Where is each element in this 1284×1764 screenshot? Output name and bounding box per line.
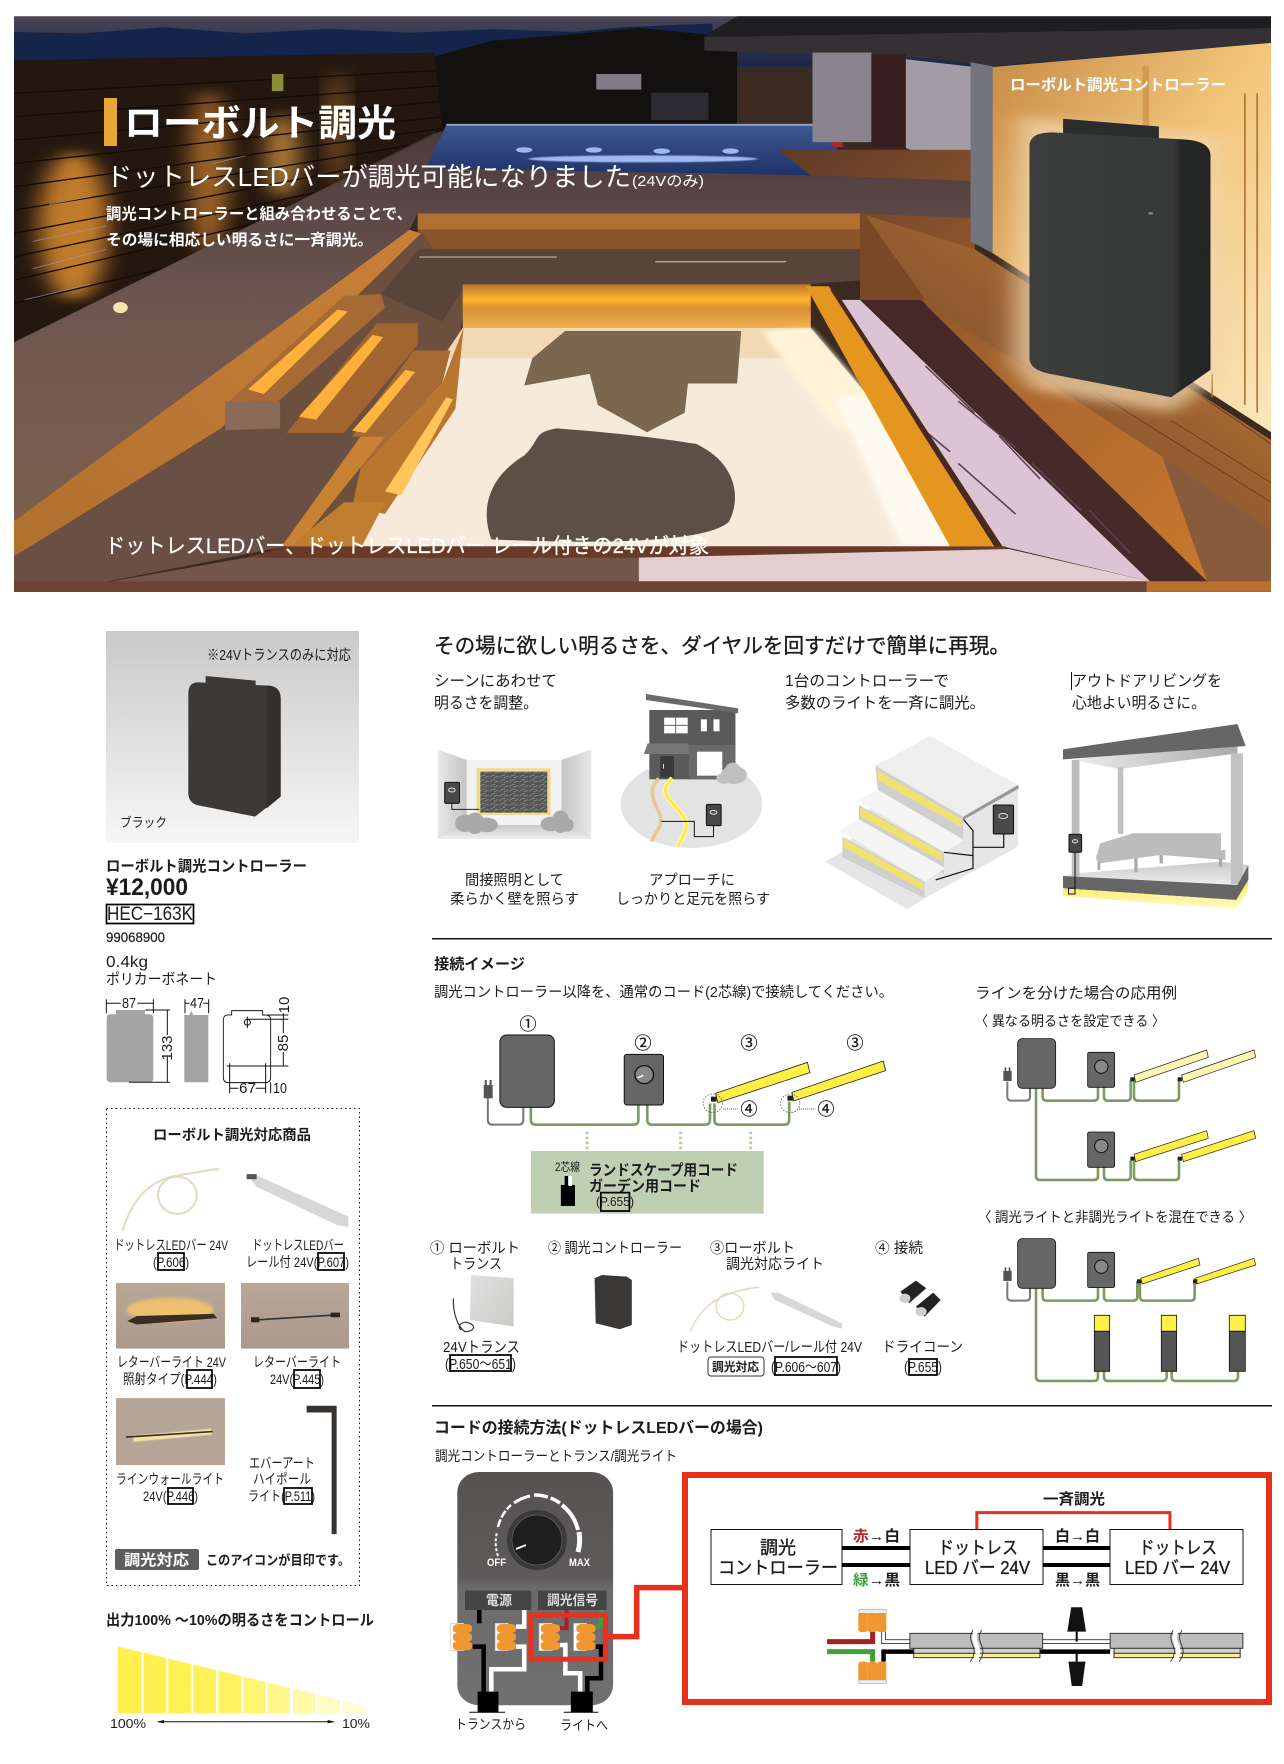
text: scene	[434, 672, 557, 712]
parts: controller	[548, 1240, 682, 1329]
illustration: house approach	[621, 694, 762, 848]
panel: compatible products	[106, 1108, 360, 1586]
hero photo: lit deck at dusk	[13, 16, 1271, 592]
wire colour labels	[853, 1527, 1100, 1589]
dimension drawings: 85	[275, 1035, 292, 1051]
section heading: line split examples: ラインを分けた場合の応用例	[975, 985, 1177, 1002]
wire colour labels: 白→白	[1055, 1527, 1100, 1545]
number markers: ①	[520, 1015, 536, 1034]
block: controller: 調光	[760, 1538, 796, 1558]
block: LED bar 1: ドットレス	[938, 1538, 1018, 1558]
cord label: ランドスケープ用コード	[589, 1162, 738, 1179]
dimension drawings: 133	[159, 1035, 176, 1061]
section heading: cord connection: コードの接続方法(ドットレスLEDバーの場合)	[434, 1418, 763, 1437]
diagram: two lines different brightness	[1003, 1039, 1256, 1180]
label: simultaneous dimming: 一斉調光	[1043, 1491, 1105, 1508]
product captions: 24V(P.446)	[143, 1488, 198, 1504]
product captions: レターバーライト	[253, 1354, 341, 1370]
wiring illustration	[827, 1607, 1243, 1686]
diagram: mixed dimmable and non-dimmable lights	[1003, 1239, 1256, 1381]
number markers: ③	[740, 1034, 758, 1053]
dimension drawings: 47	[190, 995, 204, 1012]
controller terminal diagram	[451, 1472, 613, 1733]
weight and material: ポリカーボネート	[106, 971, 217, 988]
dimension drawings: 10	[273, 1080, 287, 1097]
hero description	[106, 205, 412, 249]
illustration: pergola	[1063, 724, 1248, 909]
parts: controller: ② 調光コントローラー	[548, 1240, 682, 1257]
hero accent bar	[104, 98, 117, 146]
price: ¥12,000	[106, 874, 188, 901]
panel heading: ローボルト調光対応商品	[153, 1126, 311, 1144]
controller terminal diagram: トランスから	[455, 1717, 526, 1732]
caption: indirect lighting: 柔らかく壁を照らす	[450, 891, 579, 908]
chart: brightness output 100% to 10%	[110, 1646, 370, 1731]
controller terminal diagram: 電源	[486, 1593, 512, 1608]
parts: dimmable lights: 調光対応ライト	[726, 1256, 824, 1273]
cord label: (P.655)	[596, 1194, 634, 1209]
chart: brightness output 100% to 10%: 10%	[342, 1716, 370, 1731]
hero target note: ドットレスLEDバー、ドットレスLEDバー レール付きの24Vが対象	[105, 535, 709, 558]
connection note: 調光コントローラー以降を、通常のコード(2芯線)で接続してください。	[434, 984, 893, 1001]
dimension drawings: 87	[122, 995, 136, 1012]
badge explanation: このアイコンが目印です。	[206, 1552, 350, 1568]
parts: dimmable lights: ③ローボルト	[710, 1240, 795, 1257]
wire colour labels: 黒→黒	[1055, 1572, 1100, 1589]
parts: transformer: ① ローボルト	[430, 1240, 520, 1257]
product code: 99068900	[106, 929, 165, 945]
product captions: レール付 24V(P.607)	[246, 1254, 349, 1270]
cord label: 2芯線	[555, 1159, 580, 1174]
controller terminal diagram: OFF	[487, 1557, 506, 1569]
product panel	[106, 631, 359, 843]
text: many lights: 1台のコントローラーで	[785, 672, 949, 690]
chart: brightness output 100% to 10%: 100%	[110, 1716, 146, 1731]
block: LED bar 1: LED バー 24V	[925, 1558, 1030, 1578]
number markers: ③	[846, 1034, 864, 1053]
parts: dimmable lights: 調光対応	[712, 1359, 759, 1374]
link line: simultaneous dimming	[977, 1513, 1170, 1529]
model number: HEC−163K	[107, 904, 193, 925]
wire colour labels: 赤→白	[853, 1527, 900, 1545]
product images	[116, 1169, 349, 1534]
product captions: ハイポール	[253, 1471, 311, 1487]
caption: approach	[616, 872, 770, 908]
dimension drawings	[106, 995, 293, 1097]
caption: indirect lighting	[450, 872, 579, 908]
product captions: ドットレスLEDバー 24V	[114, 1237, 228, 1253]
product note: ※24Vトランスのみに対応	[207, 647, 351, 664]
colour label: ブラック	[120, 815, 167, 830]
hero subtitle: ドットレスLEDバーが調光可能になりました	[106, 162, 631, 192]
hero title: ローボルト調光	[124, 103, 396, 144]
parts: dimmable lights: ドットレスLEDバー/レール付 24V	[677, 1339, 862, 1356]
weight and material: 0.4kg	[106, 954, 148, 971]
cord label	[555, 1159, 738, 1209]
subheading: different brightness: 〈 異なる明るさを設定できる 〉	[975, 1013, 1165, 1029]
parts: transformer: 24Vトランス	[443, 1339, 520, 1356]
text: outdoor living	[1071, 672, 1222, 712]
weight and material	[106, 954, 217, 988]
hero subtitle: (24Vのみ)	[632, 173, 704, 190]
product captions: ドットレスLEDバー	[252, 1237, 344, 1253]
dimming range heading: 出力100% ～10%の明るさをコントロール	[106, 1612, 374, 1629]
parts: connector: (P.655)	[904, 1360, 942, 1376]
connection note: 調光コントローラーとトランス/調光ライト	[435, 1448, 677, 1464]
arrow: red connector to enlarged view	[605, 1588, 683, 1637]
dial and gauge	[496, 1495, 580, 1570]
product captions: ラインウォールライト	[116, 1471, 224, 1487]
product captions: エバーアート	[249, 1455, 315, 1471]
parts: connector	[875, 1240, 963, 1376]
hero controller label: ローボルト調光コントローラー	[1010, 76, 1226, 94]
controller terminal diagram: ライトへ	[560, 1718, 608, 1733]
number markers: ④	[740, 1100, 758, 1119]
caption: approach: しっかりと足元を照らす	[616, 891, 770, 908]
section heading: connection image: 接続イメージ	[434, 955, 525, 973]
parts: transformer: (P.650～651)	[445, 1357, 516, 1373]
illustration: stairs	[825, 736, 1019, 909]
divider	[432, 1405, 1272, 1406]
block: controller: コントローラー	[718, 1558, 838, 1578]
text: outdoor living: 心地よい明るさに。	[1072, 694, 1206, 712]
cord label: ガーデン用コード	[589, 1177, 701, 1195]
section heading: easy dimming: その場に欲しい明るさを、ダイヤルを回すだけで簡単に再現。	[434, 635, 1010, 658]
controller terminal diagram: 調光信号	[547, 1592, 598, 1608]
panel: enlarged wiring	[685, 1475, 1269, 1702]
block: controller	[711, 1530, 842, 1584]
parts: connector: ドライコーン	[882, 1340, 963, 1356]
parts: dimmable lights	[677, 1240, 862, 1376]
dimension drawings: 10	[276, 997, 293, 1013]
hero description: その場に相応しい明るさに一斉調光。	[106, 231, 373, 249]
product captions: 24V(P.445)	[270, 1371, 324, 1387]
icon: controller product	[188, 676, 281, 817]
text: scene: シーンにあわせて	[434, 672, 557, 690]
connection diagram	[484, 1015, 886, 1214]
caption: indirect lighting: 間接照明として	[465, 872, 564, 889]
controller terminal diagram: MAX	[569, 1557, 591, 1569]
parts: transformer: トランス	[450, 1257, 502, 1273]
icon: dimming badge: 調光対応	[124, 1551, 189, 1569]
divider	[432, 938, 1272, 940]
text: scene: 明るさを調整。	[434, 694, 538, 712]
block: LED bar 2: LED バー 24V	[1125, 1558, 1230, 1578]
hero description: 調光コントローラーと組み合わせることで、	[106, 205, 412, 223]
number markers: ②	[634, 1034, 652, 1053]
wire colour labels: 緑→黒	[853, 1571, 900, 1589]
illustration: wall room	[438, 749, 591, 839]
product captions: (P.606)	[153, 1254, 189, 1270]
block: LED bar 2	[1110, 1530, 1243, 1584]
block: LED bar 1	[910, 1530, 1043, 1584]
subheading: mixed lights: 〈 調光ライトと非調光ライトを混在できる 〉	[978, 1209, 1252, 1225]
text: outdoor living: アウトドアリビングを	[1072, 672, 1222, 690]
number markers: ④	[818, 1100, 834, 1119]
product captions: 照射タイプ(P.444)	[123, 1371, 217, 1387]
product name: ローボルト調光コントローラー	[106, 858, 307, 875]
parts: transformer	[430, 1240, 520, 1373]
block: LED bar 2: ドットレス	[1139, 1538, 1217, 1558]
text: many lights	[785, 672, 985, 712]
caption: approach: アプローチに	[649, 872, 735, 889]
icon: dimming badge	[115, 1549, 199, 1570]
product captions: レターバーライト 24V	[117, 1354, 227, 1370]
parts: dimmable lights: (P.606～607)	[771, 1360, 841, 1376]
product captions: ライト(P.511)	[248, 1488, 315, 1504]
number markers	[520, 1015, 864, 1119]
product captions	[114, 1237, 349, 1504]
parts: connector: ④ 接続	[875, 1240, 924, 1257]
connection lines	[842, 1546, 1110, 1567]
dimension drawings: 67	[239, 1080, 256, 1097]
text: many lights: 多数のライトを一斉に調光。	[785, 694, 985, 712]
